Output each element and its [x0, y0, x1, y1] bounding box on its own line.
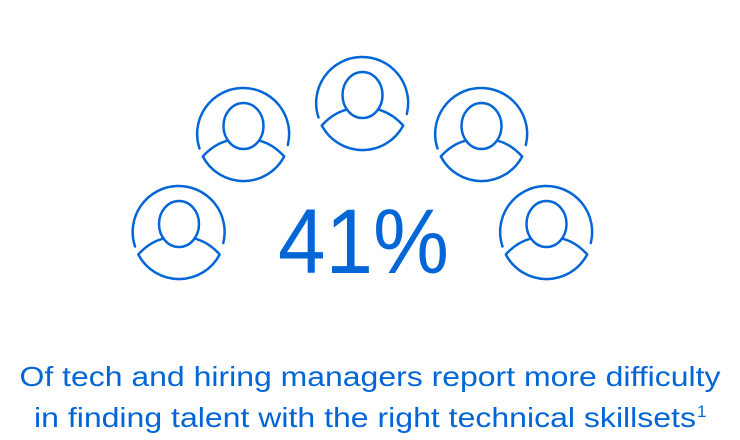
text block: description: in finding talent with the right technical skillsets	[34, 402, 696, 433]
icon: person right	[435, 88, 527, 181]
text block: description: Of tech and hiring managers report more difficulty	[20, 361, 720, 392]
text block: description	[20, 361, 720, 433]
statistic: 41%: 41%	[278, 191, 449, 293]
icon: person centre	[316, 57, 408, 150]
text block: description: 1	[697, 402, 706, 421]
icon: person left	[197, 88, 289, 181]
icon: person far left	[133, 186, 225, 279]
icon: person far right	[500, 186, 592, 279]
